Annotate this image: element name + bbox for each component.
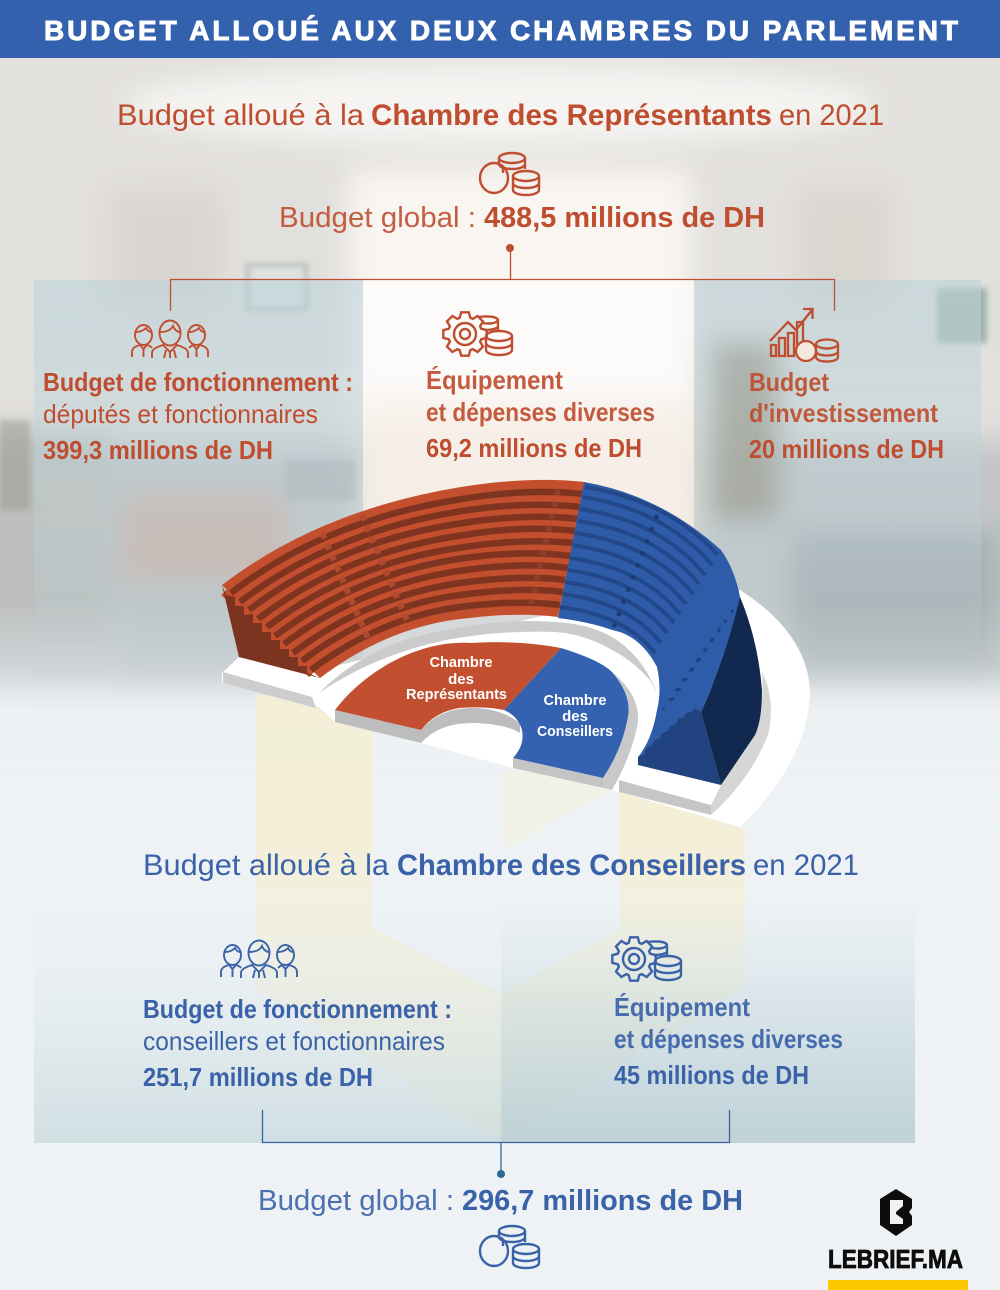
icon: coins red [480,153,539,195]
icon: people red [132,320,208,358]
block: budget de fonctionnement conseillers [143,994,452,1092]
panel: bottom tinted block [34,840,915,1143]
icon: people blue [221,940,297,978]
block: équipement red: 69,2 millions de DH [426,433,642,463]
hemicycle illustration [222,480,810,827]
photo details [0,265,987,530]
block: équipement blue: Équipement [614,992,750,1022]
block: budget de fonctionnement députés: députés et fonctionnaires [43,399,318,429]
icon: gear and coins blue [612,937,681,981]
block: budget de fonctionnement députés [43,367,353,465]
block: équipement red [426,365,655,463]
global budget blue [258,1185,743,1217]
block: budget de fonctionnement conseillers: 251,7 millions de DH [143,1062,373,1092]
connector: blue bracket [262,1110,730,1178]
heading: Chambre des Représentants [117,99,884,132]
block: budget d'investissement [749,367,944,464]
red stands [222,480,585,678]
white platform fan [222,590,810,827]
block: équipement red: et dépenses diverses [426,397,655,427]
block: budget de fonctionnement conseillers: Budget de fonctionnement : [143,994,452,1024]
header bar [0,0,1000,58]
panel: right tinted column [694,280,981,710]
heading: Chambre des Conseillers: Budget alloué à la [143,849,389,882]
label: Chambre des Conseillers: Chambre [544,692,606,709]
block: budget d'investissement: d'investissement [749,398,938,428]
block: budget de fonctionnement députés: 399,3 millions de DH [43,435,273,465]
global budget red: Budget global : [279,202,476,234]
logo: LeBrief.ma: LEBRIEF.MA [828,1244,963,1274]
block: équipement blue: et dépenses diverses [614,1024,843,1054]
panel: centre light column [363,280,694,710]
global budget red [279,202,765,234]
heading: Chambre des Représentants: en 2021 [779,99,884,132]
heading: Chambre des Représentants: Chambre des Représentants [371,99,772,132]
label: Chambre des Conseillers: Conseillers [537,723,613,740]
label: Chambre des Représentants [406,654,507,703]
heading: Chambre des Représentants: Budget alloué à la [117,99,364,132]
heading: Chambre des Conseillers: en 2021 [753,849,859,882]
blue stands [558,482,762,785]
icon: coins blue [480,1226,539,1268]
label: Chambre des Représentants: Représentants [406,686,507,703]
label: Chambre des Conseillers [537,692,613,740]
icon: investment chart with coins [770,309,838,362]
label: Chambre des Conseillers: des [562,708,588,725]
title: BUDGET ALLOUÉ AUX DEUX CHAMBRES DU PARLEMENT [44,15,958,46]
label: Chambre des Représentants: Chambre [430,654,492,671]
yellow logo watermark [256,695,745,1140]
global budget blue: Budget global : [258,1185,454,1217]
block: équipement red: Équipement [426,365,563,395]
global budget blue: 296,7 millions de DH [462,1185,743,1217]
connector: red tree [170,244,834,311]
grey arc around the floor [319,621,657,693]
block: équipement blue [614,992,843,1090]
platform sides [223,657,771,815]
panel: left tinted column [34,280,363,710]
logo: LeBrief.ma [828,1189,968,1290]
label: Chambre des Représentants: des [448,671,474,688]
block: équipement blue: 45 millions de DH [614,1060,809,1090]
heading: Chambre des Conseillers: Chambre des Conseillers [397,849,746,882]
global budget red: 488,5 millions de DH [484,202,765,234]
block: budget d'investissement: 20 millions de DH [749,434,944,464]
heading: Chambre des Conseillers [143,849,859,882]
block: budget de fonctionnement conseillers: conseillers et fonctionnaires [143,1026,445,1056]
block: budget de fonctionnement députés: Budget de fonctionnement : [43,367,353,397]
stepped side of red stands [222,585,320,678]
block: budget d'investissement: Budget [749,367,829,397]
stepped front of blue stands [638,708,721,785]
floor: red and blue wedges [335,642,638,790]
icon: gear and coins red [443,312,512,356]
